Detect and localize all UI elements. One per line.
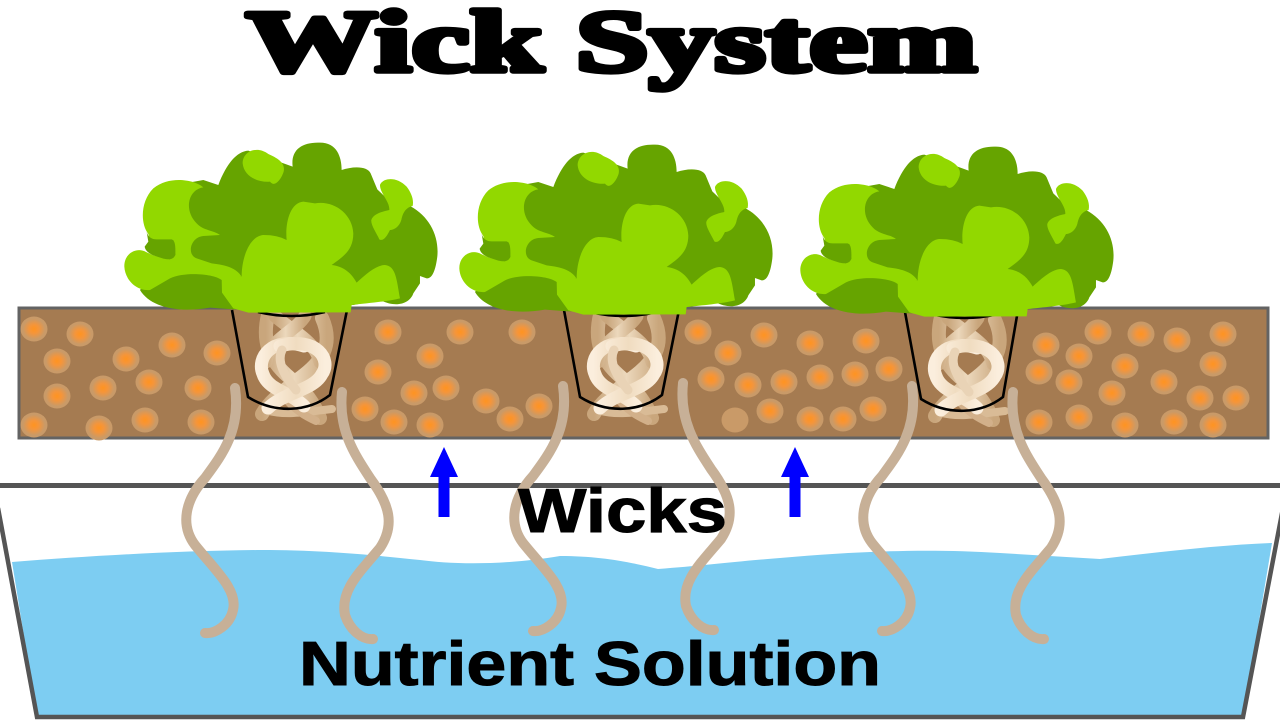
reservoir rim	[0, 483, 1280, 488]
plant 1 roots and net cup	[232, 310, 347, 421]
plant 3 roots and net cup	[905, 310, 1018, 423]
lettuce plant 1	[124, 143, 438, 313]
lettuce plant 3	[800, 147, 1114, 317]
nutrient solution water	[12, 543, 1272, 717]
growing medium pebbles	[20, 316, 1250, 440]
label: wicks: Wicks	[518, 477, 727, 546]
plant 2 roots and net cup	[564, 310, 679, 421]
arrow: upward wicking 2	[781, 447, 809, 517]
growing tray	[19, 308, 1268, 438]
label: nutrient solution: Nutrient Solution	[299, 630, 881, 699]
reservoir tank	[0, 508, 1280, 717]
lettuce plant 2	[459, 145, 773, 315]
wicks	[186, 383, 1060, 639]
arrow: upward wicking 1	[430, 447, 458, 517]
